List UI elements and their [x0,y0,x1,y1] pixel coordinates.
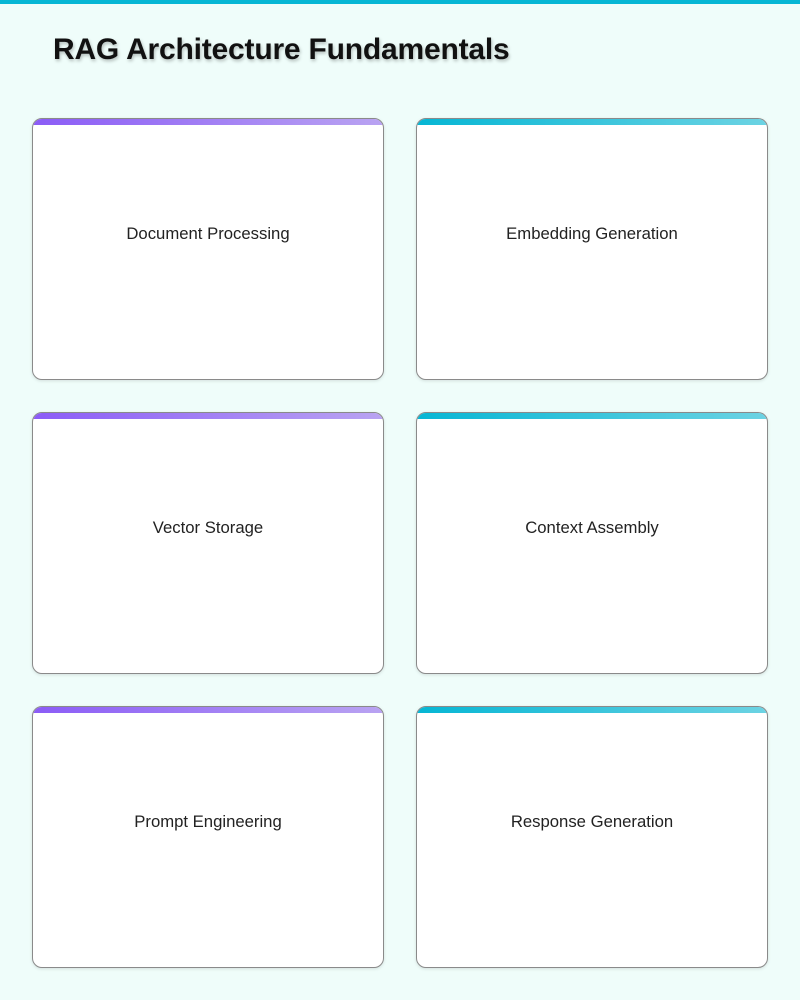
panel: context assembly [416,412,768,674]
panel: prompt engineering [32,706,384,968]
title: RAG Architecture Fundamentals [53,33,510,66]
panel: embedding generation: Embedding Generation [506,224,678,243]
panel: response generation: Response Generation [511,812,673,831]
panel: document processing: Document Processing [126,224,290,243]
top accent bar [0,0,800,4]
panel: response generation [416,706,768,968]
panel: embedding generation [416,118,768,380]
panel: vector storage [32,412,384,674]
panel: vector storage: Vector Storage [153,518,263,537]
panel: prompt engineering: Prompt Engineering [134,812,282,831]
panel: document processing [32,118,384,380]
panel: context assembly: Context Assembly [525,518,659,537]
